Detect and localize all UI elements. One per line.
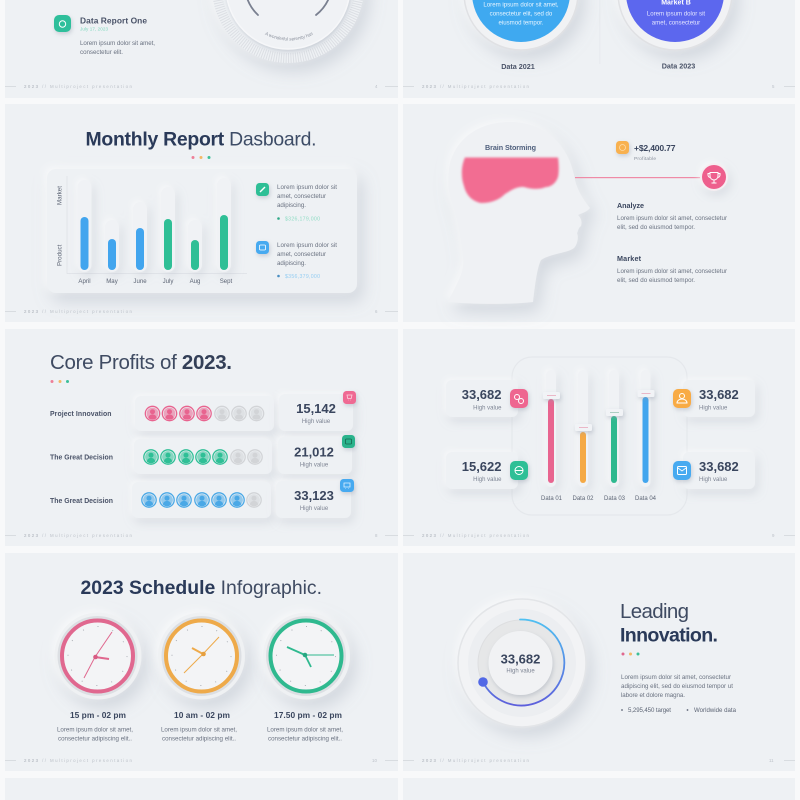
card: left top value: 33,682 (462, 387, 502, 402)
text block: first legend: amet, consectetur (277, 193, 326, 200)
bar chart: July (163, 278, 174, 285)
footer: 2023 // Multiproject presentation (422, 758, 530, 763)
icon: trophy (700, 163, 728, 191)
bar chart: Sept (220, 278, 233, 285)
clock: green (263, 612, 350, 700)
panel: slide top right (403, 0, 795, 98)
heading: data report one: Data Report One (80, 16, 147, 26)
text block: first time: consectetur adipiscing elit.. (58, 736, 132, 742)
card: right top value (673, 380, 755, 417)
row: project innovation: 15,142 (296, 401, 336, 416)
footer (5, 758, 398, 763)
connector line (575, 177, 703, 178)
card: right bottom value: 33,682 (699, 459, 739, 474)
clock: pink (54, 612, 142, 700)
text block: second legend: amet, consectetur (277, 251, 326, 258)
brain fill (462, 158, 559, 203)
text block: description (621, 674, 733, 699)
row: project innovation: High value (302, 419, 331, 425)
panel: core profits (5, 329, 398, 546)
radial gauge (458, 599, 586, 727)
panel: schedule (5, 553, 398, 771)
row: the great decision green: High value (300, 462, 329, 468)
bullet list: 5,295,450 target (628, 707, 671, 714)
text block: second time: 10 am - 02 pm (174, 710, 230, 720)
icon: green home badge (54, 15, 71, 32)
title: 2023 Schedule Infographic. (80, 577, 322, 599)
panel: slide top left (5, 0, 398, 98)
card: left top value (446, 380, 528, 417)
text block: second time (161, 710, 237, 742)
card: left bottom value: 15,622 (462, 459, 502, 474)
row: the great decision blue: The Great Decision (50, 498, 113, 505)
footer: 2023 // Multiproject presentation (422, 533, 530, 538)
text block: analyze: elit, sed do eiusmod tempor. (617, 224, 695, 231)
text block: second legend: $356,379,000 (285, 274, 320, 280)
text block: third time (267, 710, 343, 742)
slider chart (541, 370, 657, 502)
footer: 2023 // Multiproject presentation (24, 533, 133, 538)
text block: first legend: $326,179,000 (285, 216, 320, 222)
panel: brain storming (403, 104, 795, 322)
footer (5, 533, 398, 538)
panel: leading innovation (403, 553, 795, 771)
card: right top value: High value (699, 406, 728, 412)
text block: report description (80, 40, 155, 56)
footer: 8 (375, 533, 378, 538)
footer: 11 (769, 758, 774, 763)
text block: second time: Lorem ipsum dolor sit amet, (161, 726, 237, 734)
row: the great decision blue: 33,123 (294, 488, 334, 503)
footer: 6 (375, 309, 378, 314)
head silhouette (448, 122, 590, 304)
text block: market: Lorem ipsum dolor sit amet, consectetur (617, 268, 727, 275)
title: Monthly Report Dasboard. (86, 128, 316, 150)
row: the great decision green: 21,012 (294, 444, 334, 460)
circle: market A: eiusmod tempor. (498, 20, 544, 26)
text block: second time: consectetur adipiscing elit.. (162, 736, 236, 742)
footer (403, 758, 795, 763)
bar chart: Aug (190, 278, 200, 285)
radial gauge: High value (506, 668, 535, 674)
row: the great decision green (50, 435, 355, 474)
clock: orange (158, 612, 245, 700)
text block: analyze: Lorem ipsum dolor sit amet, consectetur (617, 215, 727, 222)
card: left bottom value: High value (473, 477, 502, 483)
bar chart: Product (56, 244, 64, 266)
text block: description: adipiscing elit, sed do eiusmod tempor ut (621, 683, 733, 690)
footer: 5 (772, 84, 775, 89)
footer: 2023 // Multiproject presentation (24, 84, 133, 89)
text block: report description: consectetur elit. (80, 49, 123, 56)
text block: market: elit, sed do eiusmod tempor. (617, 277, 695, 284)
icon: orange coin (616, 141, 629, 154)
text block: third time: consectetur adipiscing elit.. (268, 736, 342, 742)
value: profitable: +$2,400.77 (634, 143, 676, 153)
card: right top value: 33,682 (699, 387, 739, 402)
circle: market B: Lorem ipsum dolor sit (647, 10, 705, 18)
slider chart: Data 01 (541, 496, 563, 502)
card: left top value: High value (473, 406, 502, 412)
label: brain storming: Brain Storming (485, 143, 536, 152)
circle: market A (464, 0, 578, 50)
heading: leading innovation (620, 600, 718, 646)
title: Core Profits of 2023. (50, 351, 232, 374)
value: profitable (634, 143, 676, 162)
card: left bottom value (446, 452, 528, 489)
frame (512, 357, 687, 515)
date: July 17, 2023 (80, 26, 108, 32)
text block: first time: 15 pm - 02 pm (70, 710, 126, 720)
footer: 2023 // Multiproject presentation (24, 758, 133, 763)
bar chart: May (106, 278, 119, 285)
footer: 9 (772, 533, 775, 538)
panel: monthly report (5, 104, 398, 322)
circle: market B: amet, consectetur (652, 20, 700, 26)
bar chart: June (133, 278, 147, 285)
footer (403, 84, 795, 89)
bullet list (621, 707, 737, 714)
text block: market (617, 254, 727, 284)
chart: radial dial: A wonderful serenity has (264, 32, 313, 41)
bar chart: Market (56, 186, 64, 205)
footer: 2023 // Multiproject presentation (422, 84, 530, 89)
heading: leading innovation: Leading (620, 600, 689, 623)
card: right bottom value: High value (699, 477, 728, 483)
slider chart: Data 03 (604, 496, 626, 502)
text block: first legend: Lorem ipsum dolor sit (277, 184, 337, 191)
text block: third time: 17.50 pm - 02 pm (274, 710, 342, 720)
circle: market B (618, 0, 732, 50)
text block: analyze (617, 201, 727, 231)
panel: bottom slide right (403, 778, 795, 800)
text block: second legend (277, 242, 337, 280)
footer: 10 (372, 758, 377, 763)
text block: third time: Lorem ipsum dolor sit amet, (267, 726, 343, 734)
label: data 2023: Data 2023 (662, 62, 695, 70)
label: data 2021: Data 2021 (501, 62, 535, 71)
slider chart: Data 02 (572, 496, 594, 502)
footer (403, 533, 795, 538)
text block: first time: Lorem ipsum dolor sit amet, (57, 726, 133, 734)
card: right bottom value (673, 452, 755, 489)
icon: blue box (256, 241, 269, 254)
text block: first time (57, 710, 133, 742)
accent dots (622, 652, 640, 656)
slider chart: Data 04 (635, 496, 657, 502)
footer: 4 (375, 84, 378, 89)
circle: market A: consectetur elit, sed do (490, 10, 553, 18)
row: the great decision blue (50, 479, 354, 518)
panel: bottom slide left (5, 778, 398, 800)
footer (5, 309, 398, 314)
bar chart: April (78, 278, 91, 285)
text block: report description: Lorem ipsum dolor sit amet, (80, 40, 155, 47)
accent dots (50, 380, 69, 383)
circle: market A: Lorem ipsum dolor sit amet, (483, 2, 559, 8)
text block: first legend (277, 184, 337, 222)
text block: description: labore et dolore magna. (621, 692, 685, 699)
panel: sliders (403, 329, 795, 546)
icon: green pencil (256, 183, 269, 196)
text block: first legend: adipiscing. (277, 202, 306, 209)
row: project innovation: Project Innovation (50, 411, 112, 418)
text block: market: Market (617, 254, 642, 263)
text block: analyze: Analyze (617, 201, 644, 210)
heading: leading innovation: Innovation. (620, 624, 718, 646)
bullet list: Worldwide data (694, 707, 737, 714)
row: the great decision blue: High value (300, 506, 329, 512)
card: chart panel (47, 169, 357, 293)
footer: 2023 // Multiproject presentation (24, 309, 133, 314)
accent dots (192, 156, 210, 159)
bar chart (56, 176, 247, 285)
radial gauge: 33,682 (501, 652, 540, 666)
row: project innovation (50, 391, 356, 431)
value: profitable: Profitable (634, 156, 656, 162)
footer (5, 84, 398, 89)
row: the great decision green: The Great Decision (50, 454, 113, 462)
text block: second legend: Lorem ipsum dolor sit (277, 242, 337, 249)
text block: second legend: adipiscing. (277, 260, 306, 267)
chart: radial dial (214, 0, 374, 76)
text block: description: Lorem ipsum dolor sit amet, consectetur (621, 674, 731, 681)
